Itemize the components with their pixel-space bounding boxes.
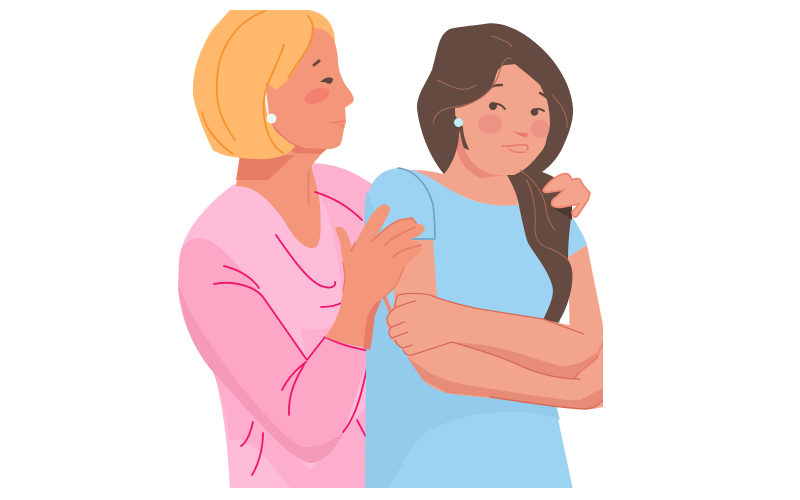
skin: younger woman's right upper arm — [568, 245, 603, 327]
figure: older woman's head — [193, 10, 354, 159]
arm shadow — [407, 357, 603, 409]
younger woman's front hair — [417, 23, 573, 174]
younger woman's long hair lock — [507, 170, 572, 323]
finger lines — [343, 218, 421, 298]
figure: older woman's body in pink top — [178, 147, 378, 490]
figure: younger woman's head — [417, 23, 573, 175]
earring — [266, 114, 276, 124]
skin: neck and shoulders — [412, 130, 518, 206]
older woman's blush — [304, 88, 330, 104]
blue sleeve with seam — [398, 168, 587, 257]
figure: younger woman's body in blue top — [364, 130, 603, 490]
younger woman's nose and mouth — [502, 131, 528, 152]
earring — [454, 118, 463, 127]
illustration: woman comforting another woman — [178, 10, 603, 488]
skin: younger woman's left upper arm — [394, 240, 437, 302]
younger woman's blush — [478, 114, 549, 138]
arm outlines — [387, 294, 603, 409]
hair strands — [433, 36, 567, 127]
skin: neck and chest — [236, 147, 327, 248]
older woman's hand on younger woman's far shoulder — [543, 174, 590, 220]
older woman's hand and forearm on shoulder — [325, 204, 425, 350]
hair strands — [202, 11, 313, 154]
older woman's lips — [330, 121, 345, 128]
younger woman's crossed arms — [386, 294, 603, 409]
older woman's blonde hair — [193, 10, 335, 159]
figure: younger woman's back hair — [417, 23, 573, 180]
younger woman's eyes and brows — [489, 85, 549, 116]
pink top fold lines — [214, 192, 370, 475]
older woman's eye and eyebrow — [314, 61, 333, 84]
